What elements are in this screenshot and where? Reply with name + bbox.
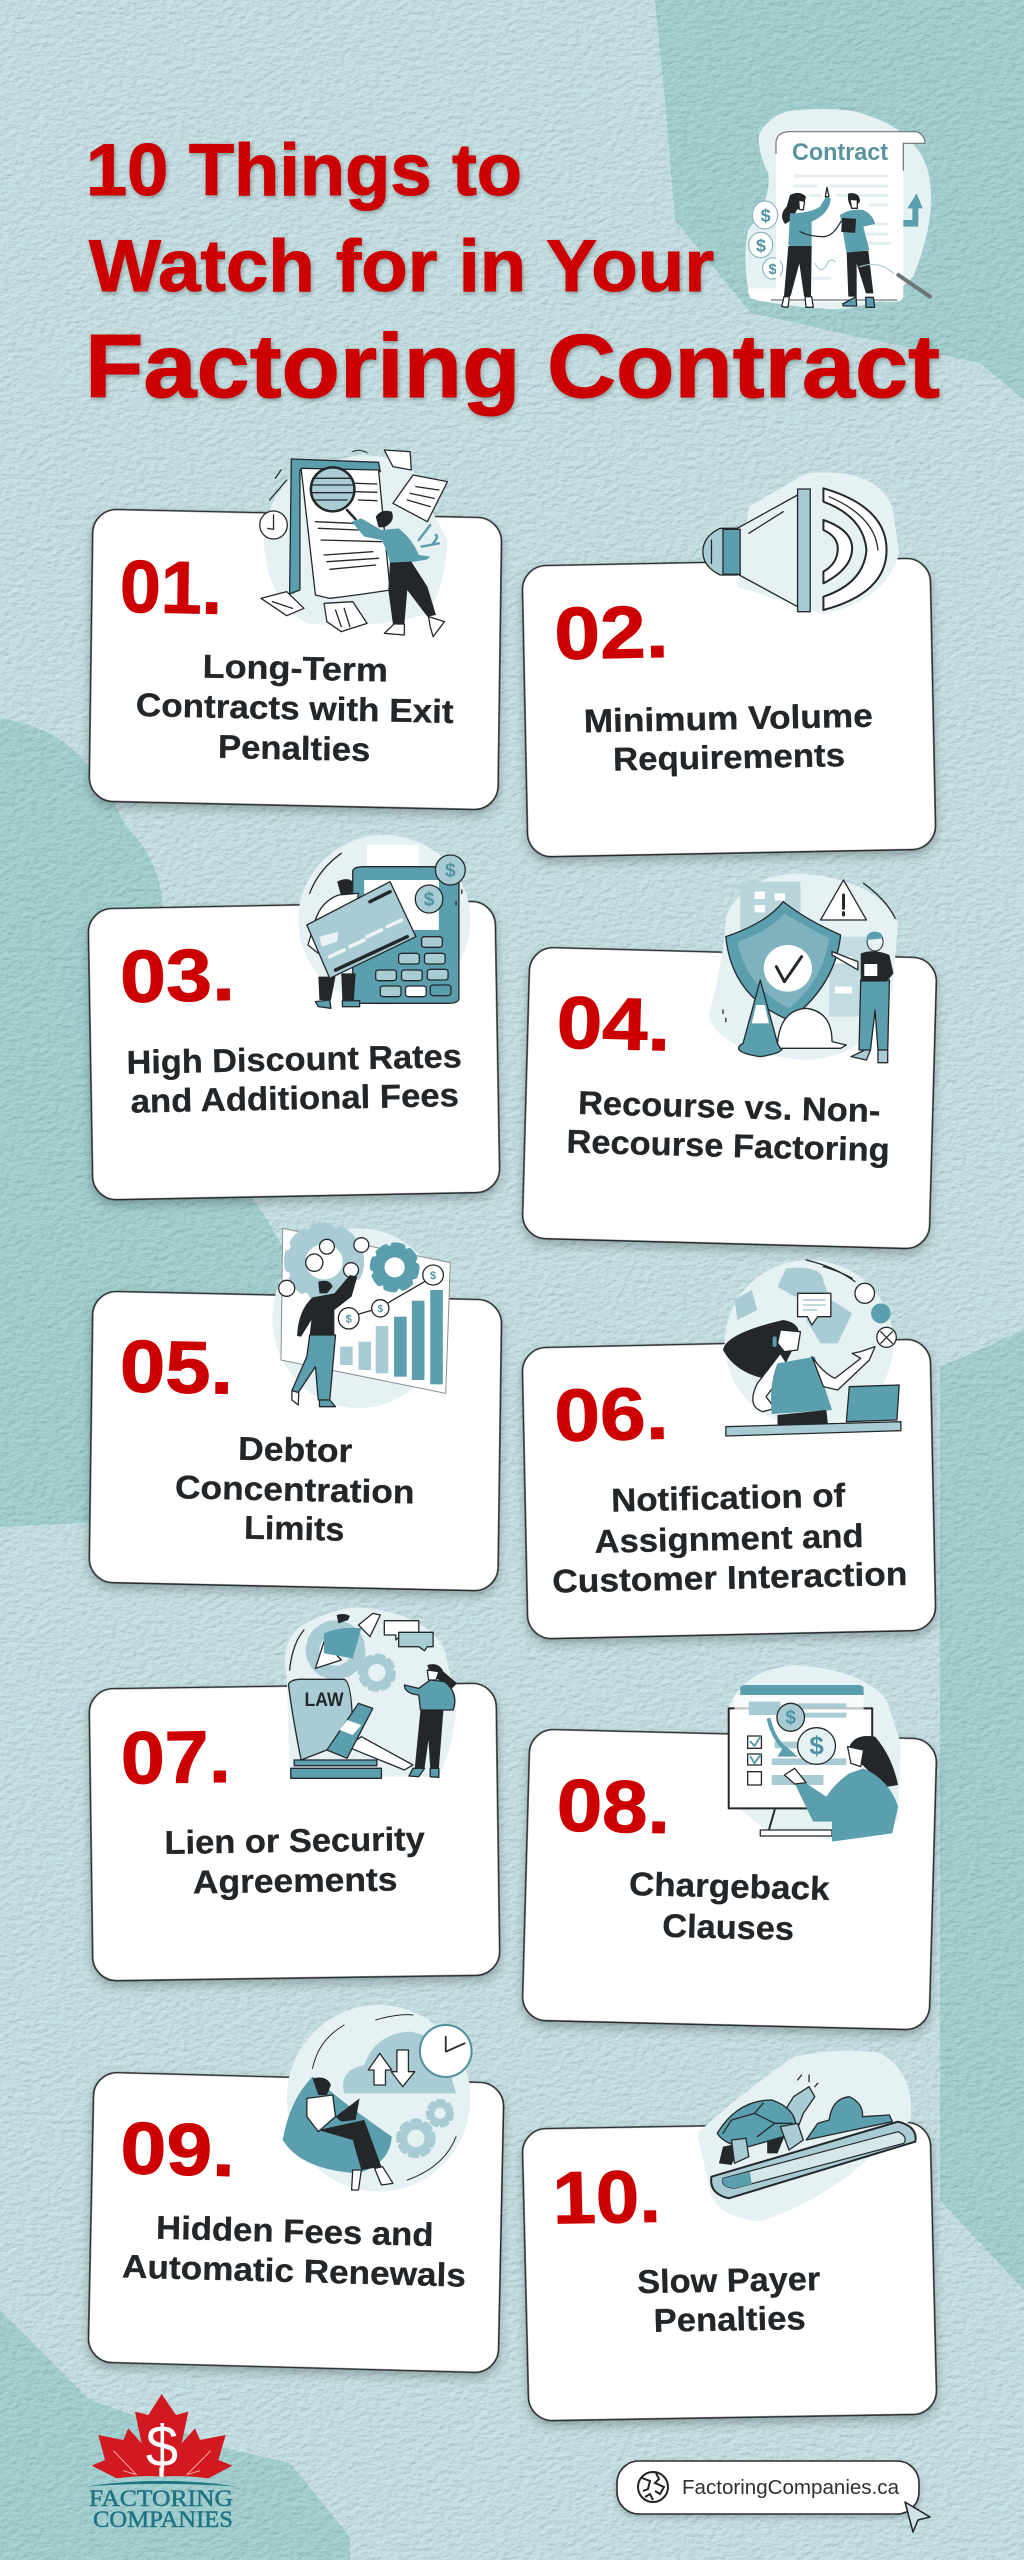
panel: 08 [522, 1665, 937, 2030]
panel: 07 [89, 1607, 500, 1981]
title: 10 Things to [86, 130, 522, 211]
icon: calculator and credit card: $ [445, 860, 456, 881]
card background [522, 2122, 937, 2421]
icon: cursor [905, 2502, 930, 2532]
heading [627, 1865, 831, 1948]
heading: High Discount Rates [126, 1037, 462, 1081]
heading: Penalties [218, 728, 371, 768]
title [85, 130, 940, 417]
number 10: 10. [552, 2155, 662, 2240]
panel: 05 [89, 1227, 502, 1591]
heading: Hidden Fees and [156, 2209, 434, 2253]
logo wordmark [89, 2486, 233, 2532]
card background [88, 901, 500, 1200]
heading: Notification of [611, 1476, 847, 1519]
heading: Slow Payer [637, 2260, 821, 2300]
logo wordmark: COMPANIES [93, 2507, 233, 2532]
icon: online payment screen: $ [785, 1708, 796, 1729]
heading: Chargeback [629, 1865, 831, 1907]
panel: 02 [522, 472, 936, 857]
number 04: 04. [556, 981, 672, 1067]
heading [122, 2208, 467, 2294]
card background [522, 558, 936, 857]
panel: 04 [522, 873, 937, 1249]
logo: Factoring Companies [85, 2394, 238, 2532]
number 09: 09. [120, 2106, 236, 2192]
dollar sign: $ [146, 2414, 178, 2479]
icon: cloud and laptop [283, 2005, 472, 2192]
number 03: 03. [119, 933, 236, 1018]
website url: FactoringCompanies.ca [682, 2477, 900, 2499]
heading: Debtor [238, 1430, 353, 1469]
panel: 01 [89, 450, 502, 810]
heading: Recourse vs. Non- [578, 1084, 881, 1129]
heading: Requirements [613, 736, 845, 778]
heading [135, 646, 454, 770]
icon: contract handshake: $ [768, 261, 777, 278]
number 07: 07. [120, 1715, 231, 1800]
heading: Penalties [653, 2299, 806, 2339]
heading [164, 1820, 426, 1901]
title: Factoring Contract [85, 317, 940, 417]
icon: customer support agent [723, 1260, 901, 1436]
heading: Lien or Security [164, 1820, 426, 1861]
number 08: 08. [556, 1763, 672, 1849]
icon: analytics board: $ [378, 1304, 384, 1315]
heading [174, 1428, 415, 1549]
icon: contract handshake: $ [761, 206, 771, 226]
panel: 09 [88, 2005, 504, 2373]
heading [550, 1475, 908, 1600]
card background [89, 509, 502, 810]
heading: Automatic Renewals [122, 2248, 466, 2294]
heading: Limits [244, 1509, 345, 1548]
number 06: 06. [554, 1372, 669, 1457]
icon: contract handshake [745, 109, 931, 309]
icon: calculator and credit card: $ [424, 889, 435, 910]
heading: Recourse Factoring [566, 1123, 890, 1168]
card background [88, 2072, 504, 2373]
heading: Agreements [193, 1860, 398, 1901]
heading: Concentration [175, 1468, 415, 1510]
heading: Assignment and [594, 1517, 864, 1560]
icon: law and gavel: LAW [305, 1690, 344, 1711]
heading: Minimum Volume [583, 697, 873, 739]
icon: globe [638, 2472, 668, 2502]
icon: online payment screen [729, 1665, 901, 1842]
icon: contract handshake: $ [756, 236, 766, 256]
panel: 03 [88, 835, 500, 1200]
icon: analytics board: $ [346, 1314, 352, 1326]
heading: Long-Term [202, 647, 388, 689]
icon: maple leaf [85, 2394, 238, 2487]
panel: 10 [522, 2051, 937, 2421]
icon: document review [260, 450, 447, 637]
icon: turtle on progress bar [697, 2051, 916, 2222]
icon: shield and safety worker [709, 873, 898, 1063]
number 02: 02. [554, 590, 669, 675]
icon: contract handshake: Contract [792, 139, 888, 166]
number 05: 05. [119, 1324, 234, 1410]
icon: law and gavel [285, 1607, 457, 1778]
card background [522, 1339, 936, 1639]
icon: analytics board: $ [430, 1270, 436, 1282]
icon: megaphone [703, 472, 899, 614]
heading [126, 1037, 463, 1120]
heading: Clauses [662, 1907, 795, 1947]
heading: Contracts with Exit [136, 686, 454, 730]
heading: Customer Interaction [552, 1555, 908, 1600]
panel: 06 [522, 1260, 936, 1639]
heading [637, 2260, 822, 2339]
icon: calculator and credit card [298, 835, 470, 1008]
logo wordmark: FACTORING [89, 2486, 233, 2511]
heading [583, 697, 874, 778]
website pill [617, 2461, 930, 2532]
card background [522, 1729, 937, 2030]
icon: online payment screen: $ [809, 1731, 824, 1761]
card background [89, 1683, 500, 1981]
card background [89, 1291, 502, 1591]
title: Watch for in Your [89, 226, 714, 307]
number 01: 01. [119, 545, 223, 630]
icon: analytics board [272, 1227, 450, 1408]
card background [522, 947, 937, 1249]
heading [566, 1084, 891, 1168]
heading: and Additional Fees [130, 1076, 459, 1120]
